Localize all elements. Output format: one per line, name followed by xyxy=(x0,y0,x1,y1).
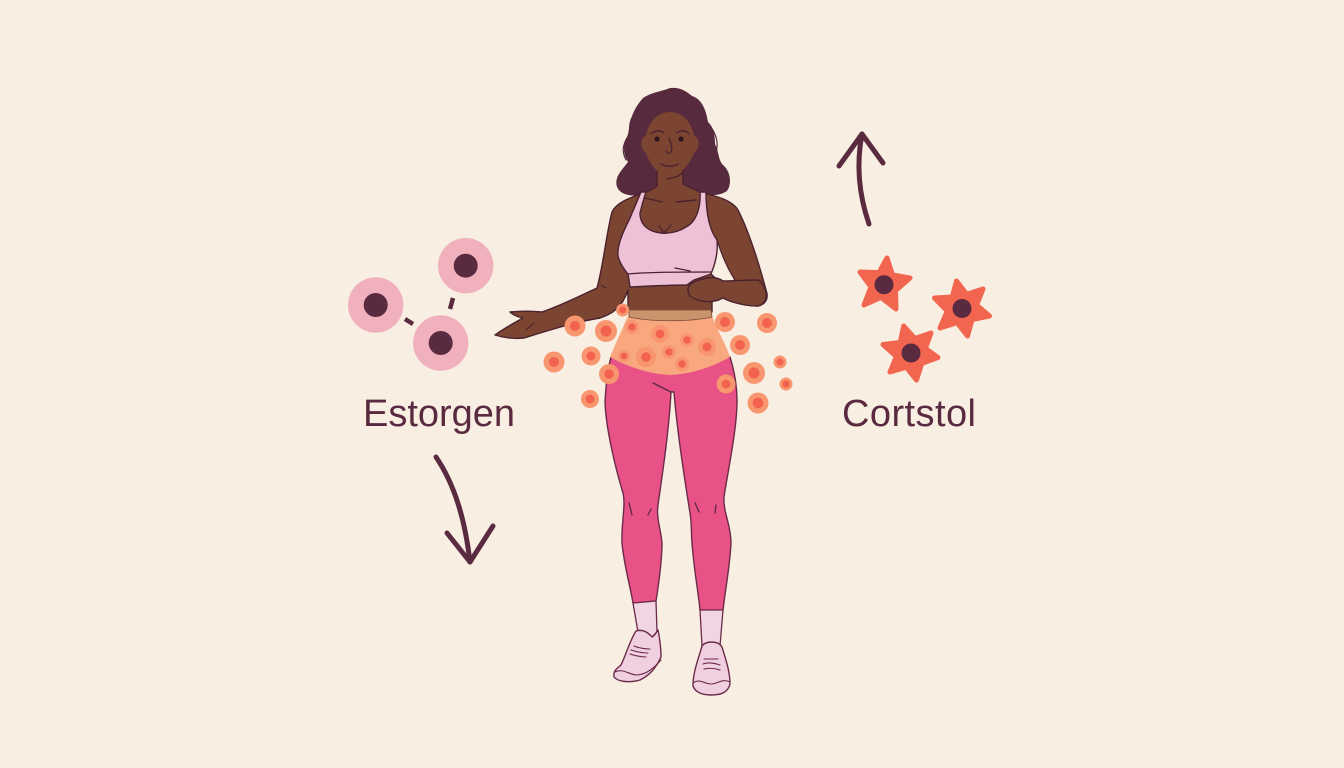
arrow: estrogen decreasing xyxy=(436,457,493,562)
illustration: woman xyxy=(495,88,767,695)
sports bra xyxy=(618,192,717,287)
neck and torso skin xyxy=(495,165,767,338)
arm gap xyxy=(711,240,735,284)
hand crease and elbow mark xyxy=(526,285,606,330)
icon: cortisol cells xyxy=(860,258,990,380)
arrow: cortisol increasing xyxy=(839,134,883,224)
fat cell spots xyxy=(544,304,792,414)
knee and crotch marks xyxy=(629,383,716,515)
hair xyxy=(616,88,730,196)
socks xyxy=(633,601,657,637)
leggings xyxy=(605,357,737,611)
orange abdominal glow xyxy=(610,316,730,375)
forearm and resting hand xyxy=(688,278,766,306)
facial features xyxy=(645,131,696,202)
face xyxy=(642,112,698,176)
bra band line xyxy=(628,225,711,274)
waistband xyxy=(629,310,712,321)
right shoe xyxy=(693,642,730,695)
label: Cortstol: Cortstol xyxy=(842,393,976,435)
left shoe xyxy=(614,630,661,682)
hair strands xyxy=(623,116,717,160)
label: Estorgen: Estorgen xyxy=(363,393,515,435)
panel: cortisol group xyxy=(839,134,990,435)
panel: estrogen group xyxy=(348,238,515,562)
icon: estrogen cells xyxy=(348,238,493,371)
